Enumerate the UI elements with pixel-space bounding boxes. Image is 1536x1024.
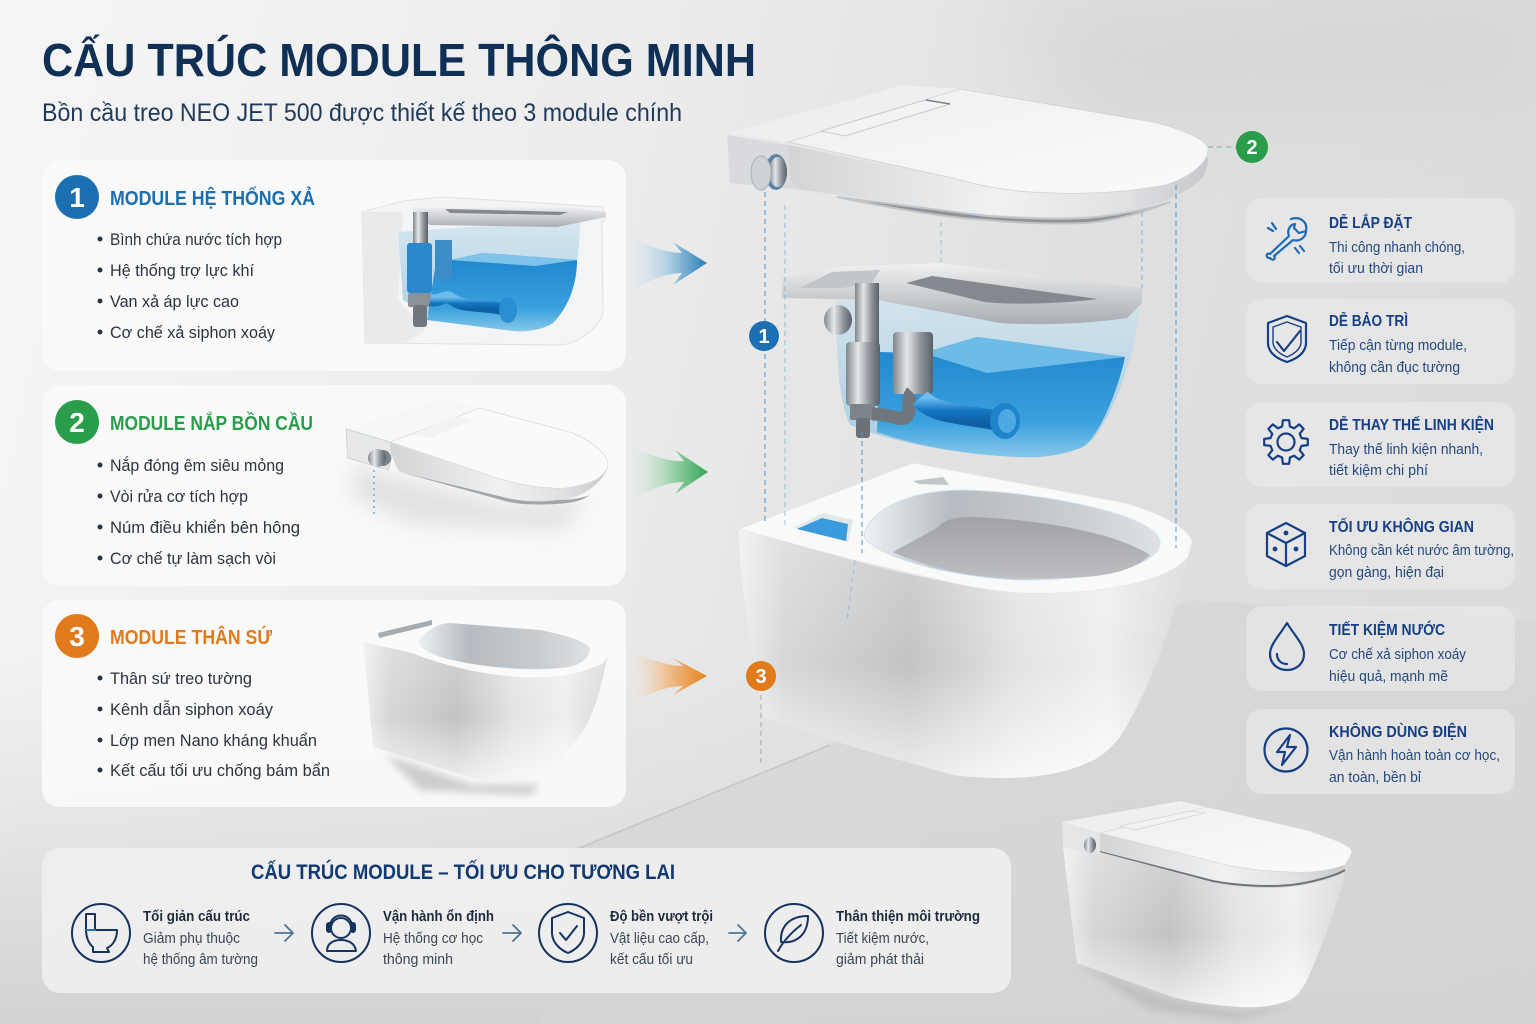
item: vận hành ổn định xyxy=(312,904,494,968)
item: độ bền vượt trội: kết cấu tối ưu xyxy=(610,952,693,968)
text: tiết kiệm nước: TIẾT KIỆM NƯỚC xyxy=(1329,620,1445,639)
list module 3: Lớp men Nano kháng khuẩn xyxy=(110,731,317,750)
card: dễ lắp đặt xyxy=(1246,198,1515,283)
subtitle: Bồn cầu treo NEO JET 500 được thiết kế theo 3 module chính xyxy=(42,99,682,127)
list module 1: Hệ thống trợ lực khí xyxy=(110,261,254,280)
title: CẤU TRÚC MODULE THÔNG MINH xyxy=(42,34,756,86)
text: dễ bảo trì: Tiếp cận từng module, xyxy=(1329,338,1467,354)
illustration: seat small xyxy=(346,399,608,530)
text: dễ bảo trì: DỄ BẢO TRÌ xyxy=(1329,311,1408,330)
illustration: ceramic body small xyxy=(363,611,607,795)
heading module 3: MODULE THÂN SỨ xyxy=(110,625,272,649)
icon: lightning bolt xyxy=(1264,728,1308,772)
list module 2 xyxy=(98,456,300,568)
heading: bottom summary: CẤU TRÚC MODULE – TỐI ƯU CHO TƯƠNG LAI xyxy=(251,858,675,884)
text: dễ lắp đặt: tối ưu thời gian xyxy=(1329,261,1423,277)
item: tối giản cấu trúc: hệ thống âm tường xyxy=(143,952,258,968)
arrow: step 3 to 4 xyxy=(729,925,746,941)
heading module 2: MODULE NẮP BỒN CẦU xyxy=(110,411,313,435)
text: dễ lắp đặt xyxy=(1329,213,1465,277)
list module 1: Van xả áp lực cao xyxy=(110,292,239,311)
badge 3 xyxy=(55,614,99,658)
badge 1 xyxy=(55,175,99,219)
icon: cube xyxy=(1267,523,1305,566)
item: tối giản cấu trúc xyxy=(72,904,258,968)
list module 1: Bình chứa nước tích hợp xyxy=(110,230,282,249)
item: độ bền vượt trội: Vật liệu cao cấp, xyxy=(610,931,709,947)
arrow: blue to tank xyxy=(627,237,707,293)
icon: shield check xyxy=(1268,316,1306,362)
panel: module hệ thống xả xyxy=(42,160,626,371)
text: không dùng điện xyxy=(1329,722,1500,786)
badge: callout 1: 1 xyxy=(758,326,770,348)
badge: callout 2 xyxy=(1236,131,1268,163)
card: không dùng điện xyxy=(1246,709,1515,794)
item: thân thiện môi trường xyxy=(765,904,980,968)
item: vận hành ổn định: Hệ thống cơ học xyxy=(383,931,483,947)
text: dễ thay thế linh kiện: DỄ THAY THẾ LINH KIỆN xyxy=(1329,415,1494,434)
text: tối ưu không gian xyxy=(1329,516,1514,581)
item: thân thiện môi trường: Thân thiện môi trường xyxy=(836,908,980,925)
badge: callout 3: 3 xyxy=(755,666,767,688)
illustration: assembled toilet xyxy=(1062,801,1352,1020)
list module 3 xyxy=(98,669,330,780)
icon: wrench xyxy=(1267,218,1306,260)
illustration: exploded ceramic body module xyxy=(739,463,1192,778)
text: dễ thay thế linh kiện: Thay thế linh kiện nhanh, xyxy=(1329,442,1483,458)
arrow: green to seat xyxy=(630,447,708,500)
text: dễ bảo trì: không cần đục tường xyxy=(1329,360,1460,376)
badge 3: 3 xyxy=(69,621,85,652)
badge 1: 1 xyxy=(69,182,85,213)
list module 2: Nắp đóng êm siêu mỏng xyxy=(110,456,284,475)
text: không dùng điện: KHÔNG DÙNG ĐIỆN xyxy=(1329,722,1467,741)
arrow: step 2 to 3 xyxy=(503,925,521,941)
list module 2: Núm điều khiển bên hông xyxy=(110,518,300,537)
item: độ bền vượt trội xyxy=(539,904,713,968)
illustration: exploded toilet seat module xyxy=(727,85,1208,224)
item: tối giản cấu trúc: Tối giản cấu trúc xyxy=(143,908,250,925)
item: thân thiện môi trường: Tiết kiệm nước, xyxy=(836,931,929,947)
list module 3: Kết cấu tối ưu chống bám bẩn xyxy=(110,761,330,780)
badge 2: 2 xyxy=(69,407,85,438)
text: tối ưu không gian: gọn gàng, hiện đại xyxy=(1329,565,1444,581)
badge: callout 2: 2 xyxy=(1246,137,1258,159)
item: tối giản cấu trúc: Giảm phụ thuộc xyxy=(143,931,240,947)
text: dễ lắp đặt: DỄ LẮP ĐẶT xyxy=(1329,213,1412,232)
text: dễ thay thế linh kiện: tiết kiệm chi phí xyxy=(1329,463,1428,479)
arrow: step 1 to 2 xyxy=(275,925,293,941)
badge 2 xyxy=(55,400,99,444)
text: tiết kiệm nước xyxy=(1329,620,1467,685)
item: thân thiện môi trường: giảm phát thải xyxy=(836,952,924,968)
arrow: orange to body xyxy=(630,652,707,704)
card: tối ưu không gian xyxy=(1246,504,1515,589)
badge: callout 3 xyxy=(746,661,776,691)
list module 2: Vòi rửa cơ tích hợp xyxy=(110,487,248,506)
badge: callout 1 xyxy=(749,321,779,351)
card: dễ thay thế linh kiện xyxy=(1246,402,1515,487)
icon: water drop xyxy=(1270,623,1304,670)
list module 3: Kênh dẫn siphon xoáy xyxy=(110,700,273,719)
text: dễ bảo trì xyxy=(1329,311,1467,376)
item: độ bền vượt trội: Độ bền vượt trội xyxy=(610,908,713,925)
text: không dùng điện: Vận hành hoàn toàn cơ học, xyxy=(1329,748,1500,764)
list module 2: Cơ chế tự làm sạch vòi xyxy=(110,549,276,568)
text: tối ưu không gian: TỐI ƯU KHÔNG GIAN xyxy=(1329,516,1474,536)
illustration: tank cutaway small xyxy=(362,197,606,345)
card: tiết kiệm nước xyxy=(1246,606,1515,691)
panel: bottom summary xyxy=(42,848,1011,993)
heading module 1: MODULE HỆ THỐNG XẢ xyxy=(110,186,315,210)
illustration: exploded water tank module xyxy=(782,263,1142,457)
list module 1: Cơ chế xả siphon xoáy xyxy=(110,323,275,342)
panel: module nắp bồn cầu xyxy=(42,385,626,586)
text: không dùng điện: an toàn, bền bỉ xyxy=(1329,770,1422,786)
list module 1 xyxy=(98,230,282,342)
text: dễ thay thế linh kiện xyxy=(1329,415,1494,479)
item: vận hành ổn định: thông minh xyxy=(383,952,453,968)
card: dễ bảo trì xyxy=(1246,299,1515,384)
text: tiết kiệm nước: hiệu quả, mạnh mẽ xyxy=(1329,669,1448,685)
item: vận hành ổn định: Vận hành ổn định xyxy=(383,908,494,925)
list module 3: Thân sứ treo tường xyxy=(110,669,252,688)
text: tối ưu không gian: Không cần két nước âm tường, xyxy=(1329,543,1514,559)
icon: gear xyxy=(1264,420,1308,464)
dashed assembly guide lines xyxy=(761,147,1238,765)
panel: module thân sứ xyxy=(42,600,626,807)
text: tiết kiệm nước: Cơ chế xả siphon xoáy xyxy=(1329,647,1467,663)
text: dễ lắp đặt: Thi công nhanh chóng, xyxy=(1329,240,1465,256)
